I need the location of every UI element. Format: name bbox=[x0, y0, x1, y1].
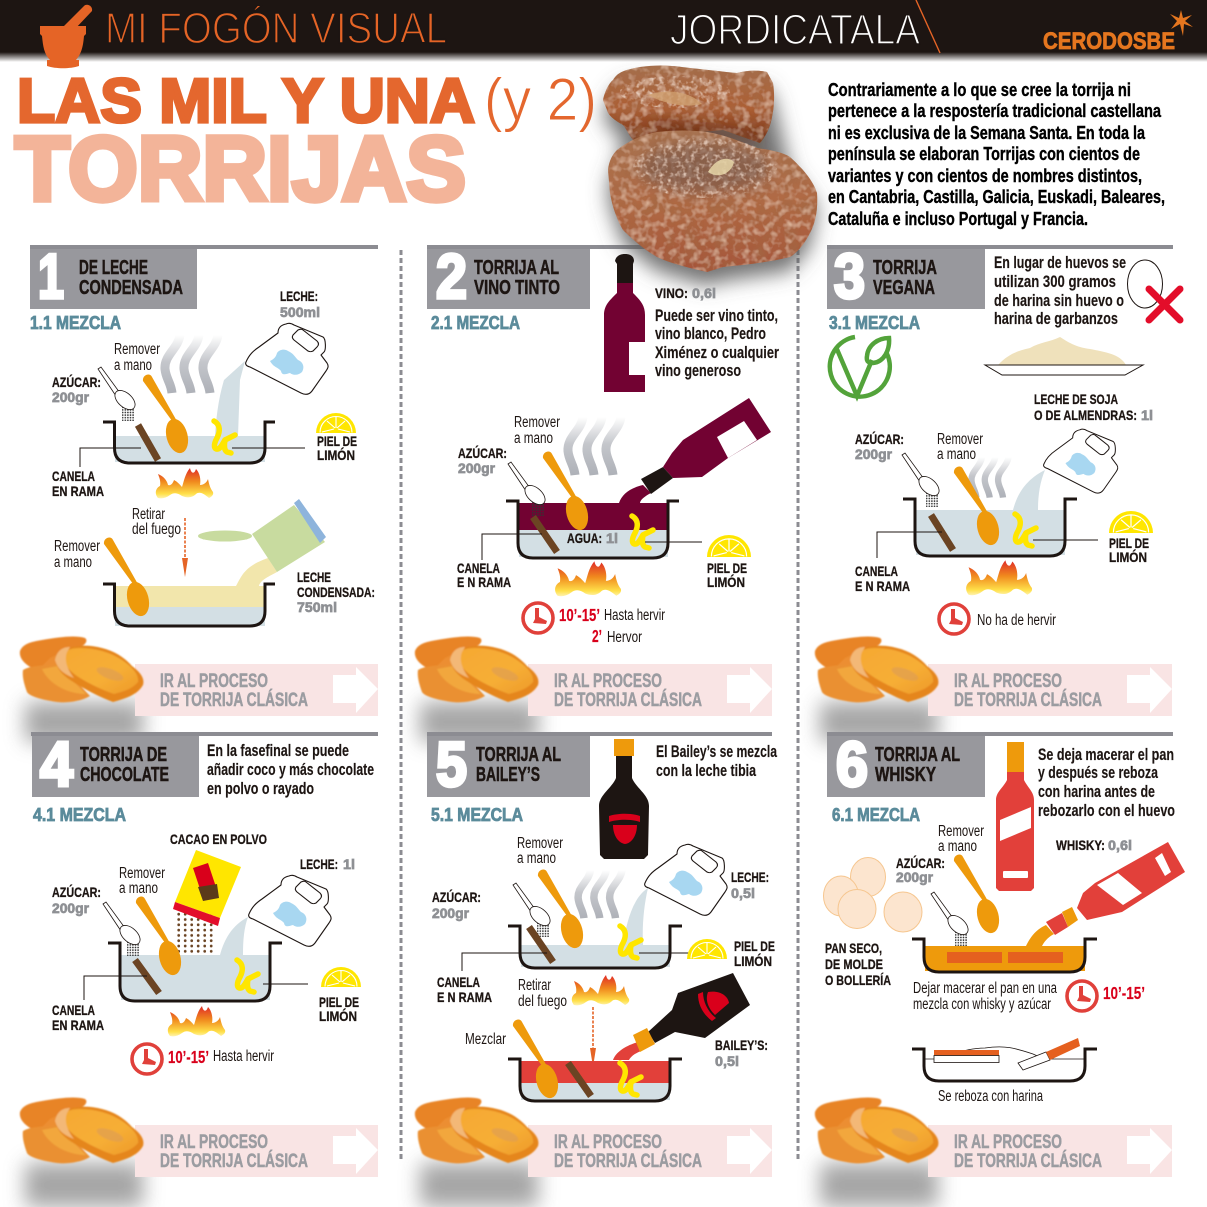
icon: sugar spoon bbox=[931, 892, 972, 946]
icon: crossed-out egg bbox=[1128, 260, 1180, 320]
pot with condensed milk bbox=[103, 584, 275, 626]
panel 2: torrija al vino tinto bbox=[415, 242, 779, 742]
canela label: E N RAMA bbox=[437, 989, 492, 1005]
shadow bbox=[820, 702, 938, 742]
retirar label: del fuego bbox=[518, 993, 567, 1010]
remover label bbox=[514, 414, 560, 447]
heading 2.1 mezcla: 2.1 MEZCLA bbox=[431, 313, 520, 333]
chocolate note bbox=[207, 741, 374, 798]
icon: lemon bbox=[321, 967, 361, 987]
panel 4 header: 4 bbox=[40, 730, 73, 800]
time notes: Hasta hervir bbox=[604, 607, 665, 624]
azucar label bbox=[432, 888, 481, 921]
shadow bbox=[25, 702, 143, 742]
panel 5 header: BAILEY’S bbox=[476, 764, 540, 786]
leader lines bbox=[462, 953, 696, 971]
whisky note: y después se reboza bbox=[1038, 763, 1158, 782]
egg substitute note: harina de garbanzos bbox=[994, 309, 1118, 328]
soy milk label: 1l bbox=[1141, 407, 1153, 423]
egg substitute note bbox=[994, 253, 1126, 328]
icon: bread slices bbox=[824, 858, 922, 932]
banner: ir al proceso bbox=[528, 1125, 772, 1177]
panel 1: de leche condensada bbox=[20, 242, 378, 742]
icon: cinnamon stick bbox=[135, 960, 159, 993]
icon: wooden spoon bbox=[954, 466, 1003, 548]
icon: cinnamon stick bbox=[931, 515, 953, 550]
canela label bbox=[437, 974, 492, 1005]
time note: Hasta hervir bbox=[213, 1048, 274, 1065]
arrow: down bbox=[590, 1007, 596, 1067]
remover label 2: a mano bbox=[54, 554, 92, 571]
panel 6 header bbox=[827, 730, 985, 800]
egg substitute note: En lugar de huevos se bbox=[994, 253, 1126, 272]
remover label: a mano bbox=[517, 850, 556, 867]
piel de limon label: LIMÓN bbox=[734, 952, 772, 969]
time note bbox=[168, 1047, 274, 1067]
azucar label bbox=[458, 444, 507, 476]
remover label: a mano bbox=[937, 446, 976, 463]
icon: cinnamon stick bbox=[138, 425, 158, 460]
condensed milk label: 750ml bbox=[297, 599, 337, 615]
panel 6 header: 6 bbox=[836, 730, 868, 800]
baileys note: El Bailey’s se mezcla bbox=[656, 742, 777, 761]
chocolate note: En la fasefinal se puede bbox=[207, 741, 349, 760]
canela label bbox=[52, 468, 104, 499]
azucar label: AZÚCAR: bbox=[896, 854, 945, 871]
time note: No ha de hervir bbox=[977, 612, 1056, 629]
panel 2 header bbox=[427, 242, 590, 312]
icon: wooden spoon 2 bbox=[513, 1019, 562, 1101]
banner: ir al proceso bbox=[928, 664, 1172, 716]
azucar label bbox=[896, 854, 945, 885]
icon: cinnamon stick bbox=[533, 517, 557, 552]
leche label: 0,5l bbox=[731, 885, 755, 901]
icon: clock bbox=[523, 603, 553, 633]
icon: lemon peel bbox=[214, 421, 235, 453]
pot with wine and water bbox=[506, 501, 679, 558]
leader lines bbox=[482, 534, 702, 560]
panel 5 header: TORRIJA AL bbox=[476, 744, 561, 766]
leche label: 500ml bbox=[280, 304, 320, 320]
icon: lemon bbox=[687, 939, 727, 959]
retirar label: del fuego bbox=[132, 521, 181, 538]
banner: ir al proceso: IR AL PROCESO bbox=[554, 671, 662, 692]
steam bbox=[971, 457, 1009, 498]
whisky note: con harina antes de bbox=[1038, 782, 1155, 801]
condensed milk label: CONDENSADA: bbox=[297, 584, 375, 600]
intro text bbox=[828, 79, 1165, 229]
soy milk label: LECHE DE SOJA bbox=[1034, 391, 1118, 407]
icon: sugar spoon bbox=[902, 453, 943, 507]
panel 4: torrija de chocolate bbox=[20, 730, 378, 1207]
azucar label: 200gr bbox=[432, 905, 470, 921]
panel 3 header: VEGANA bbox=[873, 277, 935, 299]
icon: mortar and pestle bbox=[40, 5, 92, 68]
remover label bbox=[114, 341, 160, 374]
icon: lemon bbox=[707, 535, 751, 557]
icon: milk jug bbox=[645, 844, 727, 915]
leader lines bbox=[877, 532, 1098, 558]
remover label bbox=[119, 865, 165, 897]
banner: ir al proceso: DE TORRIJA CLÁSICA bbox=[554, 1150, 702, 1172]
icon: lemon peel bbox=[620, 926, 641, 958]
banner: ir al proceso bbox=[135, 1125, 378, 1177]
icon: sugar spoon bbox=[513, 883, 554, 937]
remover label bbox=[938, 823, 984, 855]
shadow bbox=[25, 1163, 143, 1207]
banner: ir al proceso: IR AL PROCESO bbox=[160, 1132, 268, 1153]
title: TORRIJAS bbox=[15, 119, 466, 220]
baileys label: BAILEY’S: bbox=[715, 1037, 768, 1053]
panel 2 header: TORRIJA AL bbox=[474, 257, 559, 279]
piel de limon label: PIEL DE bbox=[734, 938, 775, 954]
photo: torrija bbox=[815, 1098, 938, 1163]
steam bbox=[165, 335, 218, 393]
icon: flame bbox=[156, 468, 213, 498]
panel 5: torrija al baileys bbox=[415, 730, 777, 1207]
banner: ir al proceso: IR AL PROCESO bbox=[954, 671, 1062, 692]
canela label: CANELA bbox=[52, 1002, 95, 1018]
pouring baileys bottle bbox=[613, 973, 750, 1060]
piel de limon label: LIMÓN bbox=[707, 573, 745, 590]
heading 1.1 mezcla: 1.1 MEZCLA bbox=[30, 313, 121, 333]
icon: wine bottle bbox=[604, 254, 646, 392]
leche label bbox=[280, 288, 320, 320]
remover label: Remover bbox=[514, 414, 560, 431]
icon: wooden spoon 2 bbox=[104, 537, 153, 619]
panel 3 header: TORRIJA bbox=[873, 257, 937, 279]
shadow bbox=[820, 1163, 938, 1207]
icon: milk jug bbox=[249, 875, 331, 946]
azucar label bbox=[52, 373, 101, 405]
wine note: vino generoso bbox=[655, 361, 741, 380]
retirar label bbox=[518, 977, 567, 1010]
leader lines bbox=[80, 448, 305, 467]
panel 3 header: 3 bbox=[834, 242, 865, 312]
panel 6: torrija al whisky bbox=[815, 730, 1185, 1207]
piel de limon label bbox=[707, 560, 747, 590]
canela label bbox=[855, 563, 910, 594]
flour note: Se reboza con harina bbox=[938, 1088, 1043, 1105]
leche label: LECHE: bbox=[280, 288, 318, 304]
panel 6 header: TORRIJA AL bbox=[875, 744, 960, 766]
piel de limon label: PIEL DE bbox=[319, 994, 359, 1010]
steam bbox=[568, 417, 621, 475]
icon: cocoa box bbox=[173, 850, 241, 926]
icon: whisky bottle bbox=[996, 742, 1034, 891]
brand: Cerodosbe bbox=[1043, 10, 1193, 55]
wine note: vino blanco, Pedro bbox=[655, 324, 766, 343]
leche label: LECHE: bbox=[300, 856, 338, 872]
canela label bbox=[457, 560, 511, 590]
remover label: a mano bbox=[514, 430, 553, 447]
retirar label: Retirar bbox=[132, 506, 165, 523]
banner: ir al proceso: IR AL PROCESO bbox=[554, 1132, 662, 1153]
leche label bbox=[731, 869, 769, 901]
remover label: Remover bbox=[119, 865, 165, 882]
condensed milk can bbox=[198, 499, 326, 586]
piel de limon label bbox=[319, 994, 359, 1024]
condensed milk label bbox=[297, 569, 375, 615]
intro text: Cataluña e incluso Portugal y Francia. bbox=[828, 208, 1088, 229]
icon: lemon peel bbox=[1015, 514, 1036, 546]
whisky amount: WHISKY: bbox=[1056, 837, 1105, 853]
icon: clock bbox=[1067, 981, 1097, 1011]
panel 1 header: CONDENSADA bbox=[79, 277, 183, 299]
piel de limon label: PIEL DE bbox=[1109, 535, 1149, 551]
icon: wooden spoon bbox=[538, 869, 587, 951]
piel de limon label: PIEL DE bbox=[707, 560, 747, 576]
panel 1 header: 1 bbox=[38, 242, 64, 312]
baileys label bbox=[715, 1037, 768, 1069]
banner: ir al proceso: DE TORRIJA CLÁSICA bbox=[160, 689, 308, 711]
piel de limon label bbox=[734, 938, 775, 969]
heading 6.1 mezcla: 6.1 MEZCLA bbox=[832, 805, 920, 825]
wine note: Puede ser vino tinto, bbox=[655, 306, 778, 325]
milk stream and pot bbox=[103, 361, 275, 463]
remover label: Remover bbox=[938, 823, 984, 840]
milk stream and pot bbox=[903, 470, 1077, 556]
soy milk label bbox=[1034, 391, 1153, 423]
icon: baileys bottle bbox=[599, 739, 649, 859]
mezclar label: Mezclar bbox=[465, 1031, 506, 1048]
remover label 2: Remover bbox=[54, 538, 100, 555]
vino amount: VINO: bbox=[655, 285, 688, 301]
icon: lemon peel bbox=[237, 960, 258, 992]
icon: flame bbox=[555, 561, 621, 596]
azucar label: 200gr bbox=[458, 460, 496, 476]
canela label: EN RAMA bbox=[52, 1017, 104, 1033]
cacao label: CACAO EN POLVO bbox=[170, 831, 267, 847]
soy milk label: O DE ALMENDRAS: bbox=[1034, 407, 1137, 423]
panel 5 header: 5 bbox=[436, 730, 467, 800]
steam bbox=[578, 870, 622, 918]
intro text: Contrariamente a lo que se cree la torrija ni bbox=[828, 79, 1131, 100]
icon: flour on plate bbox=[985, 337, 1143, 375]
photo: torrija bbox=[415, 1098, 538, 1163]
time: 10’-15’ bbox=[1103, 983, 1145, 1003]
icon: wooden spoon bbox=[136, 896, 185, 978]
shadow bbox=[420, 1163, 538, 1207]
piel de limon label bbox=[1109, 535, 1149, 565]
heading 3.1 mezcla: 3.1 MEZCLA bbox=[829, 313, 920, 333]
piel de limon label bbox=[317, 433, 357, 463]
bread label bbox=[825, 940, 891, 988]
agua label: AGUA: bbox=[567, 530, 602, 546]
icon: flame bbox=[168, 1006, 225, 1036]
photo: torrija bbox=[415, 637, 538, 702]
wine note bbox=[655, 306, 779, 380]
whisky note bbox=[1038, 745, 1175, 820]
azucar label: 200gr bbox=[896, 869, 934, 885]
header band bbox=[0, 0, 1207, 62]
bread label: O BOLLERÍA bbox=[825, 972, 891, 988]
chocolate note: añadir coco y más chocolate bbox=[207, 760, 374, 779]
leche label: 1l bbox=[343, 856, 355, 872]
panel 3: torrija vegana bbox=[815, 242, 1180, 742]
pot with flour bbox=[912, 1038, 1097, 1081]
icon: wooden spoon bbox=[543, 451, 592, 533]
heading 5.1 mezcla: 5.1 MEZCLA bbox=[431, 805, 523, 825]
baileys note bbox=[656, 742, 777, 780]
piel de limon label: PIEL DE bbox=[317, 433, 357, 449]
chocolate note: en polvo o rayado bbox=[207, 779, 314, 798]
pot with whisky bbox=[912, 939, 1097, 972]
remover label: Remover bbox=[114, 341, 160, 358]
cacao dust bbox=[176, 912, 216, 964]
brand: Cerodosbe: CERODOSBE bbox=[1043, 28, 1175, 55]
separators bbox=[401, 250, 798, 1162]
panel 4 header bbox=[32, 730, 199, 800]
banner: ir al proceso bbox=[528, 664, 772, 716]
piel de limon label: LIMÓN bbox=[317, 446, 355, 463]
pouring whisky bottle bbox=[1026, 842, 1185, 946]
maceration note: mezcla con whisky y azúcar bbox=[913, 996, 1051, 1013]
heading 4.1 mezcla: 4.1 MEZCLA bbox=[33, 805, 126, 825]
icon: sugar spoon bbox=[508, 462, 549, 516]
maceration note: Dejar macerar el pan en una bbox=[913, 980, 1057, 997]
banner: ir al proceso bbox=[928, 1125, 1172, 1177]
remover label: a mano bbox=[938, 838, 977, 855]
piel de limon label: LIMÓN bbox=[1109, 548, 1147, 565]
vino amount: 0,6l bbox=[692, 285, 716, 301]
maceration note bbox=[913, 980, 1057, 1013]
piel de limon label: LIMÓN bbox=[319, 1007, 357, 1024]
azucar label: 200gr bbox=[52, 389, 90, 405]
icon: lemon peel 2 bbox=[620, 1063, 641, 1095]
photo: torrija bbox=[815, 637, 938, 702]
canela label: CANELA bbox=[457, 560, 500, 576]
icon: lemon peel bbox=[632, 516, 653, 548]
banner: ir al proceso: DE TORRIJA CLÁSICA bbox=[160, 1150, 308, 1172]
title bbox=[15, 66, 597, 220]
baileys label: 0,5l bbox=[715, 1053, 739, 1069]
remover label 2 bbox=[54, 538, 100, 571]
azucar label bbox=[855, 430, 904, 462]
panel 3 header bbox=[827, 242, 985, 312]
icon: flame bbox=[572, 975, 629, 1005]
retirar label bbox=[132, 506, 181, 538]
panel 5 header bbox=[427, 730, 590, 800]
canela label: EN RAMA bbox=[52, 483, 104, 499]
panel 6 header: WHISKY bbox=[875, 764, 937, 786]
photo: caramelised torrijas bbox=[603, 65, 817, 286]
icon: lemon bbox=[316, 413, 356, 433]
azucar label bbox=[52, 883, 101, 916]
banner: ir al proceso: DE TORRIJA CLÁSICA bbox=[554, 689, 702, 711]
canela label: CANELA bbox=[855, 563, 898, 579]
icon: vegan symbol bbox=[830, 337, 890, 397]
retirar label: Retirar bbox=[518, 977, 551, 994]
time notes bbox=[559, 605, 665, 646]
azucar label: AZÚCAR: bbox=[458, 444, 507, 461]
panel 4 header: CHOCOLATE bbox=[80, 764, 169, 786]
title: LAS MIL Y UNA bbox=[17, 67, 475, 136]
time notes: 10’-15’ bbox=[559, 605, 600, 625]
icon: milk jug bbox=[246, 323, 328, 394]
wine note: Ximénez o cualquier bbox=[655, 343, 779, 362]
canela label bbox=[52, 1002, 104, 1033]
canela label: CANELA bbox=[52, 468, 95, 484]
panel 1 header bbox=[30, 242, 197, 312]
azucar label: AZÚCAR: bbox=[52, 373, 101, 390]
icon: milk jug bbox=[1044, 429, 1118, 493]
pot with baileys bbox=[508, 1059, 682, 1101]
remover label: Remover bbox=[937, 431, 983, 448]
baileys note: con la leche tibia bbox=[656, 761, 756, 780]
bread label: DE MOLDE bbox=[825, 956, 883, 972]
icon: cinnamon stick bbox=[529, 927, 553, 962]
icon: flame bbox=[966, 560, 1032, 595]
remover label bbox=[937, 431, 983, 463]
pouring wine bottle bbox=[619, 398, 771, 503]
azucar label: AZÚCAR: bbox=[52, 883, 101, 900]
icon: lemon bbox=[1109, 511, 1153, 533]
milk stream and pot bbox=[108, 917, 282, 1001]
whisky amount: 0,6l bbox=[1108, 837, 1132, 853]
canela label: CANELA bbox=[437, 974, 480, 990]
icon: wooden spoon bbox=[143, 374, 192, 456]
panel 4 header: TORRIJA DE bbox=[80, 744, 167, 766]
remover label bbox=[517, 835, 563, 867]
remover label: a mano bbox=[119, 880, 158, 897]
banner: ir al proceso: DE TORRIJA CLÁSICA bbox=[954, 689, 1102, 711]
banner: ir al proceso: IR AL PROCESO bbox=[954, 1132, 1062, 1153]
leader lines bbox=[84, 976, 308, 1000]
brand: Mi Fogón Visual: MI FOGÓN VISUAL bbox=[105, 4, 447, 53]
agua label: 1l bbox=[606, 530, 618, 546]
azucar label: AZÚCAR: bbox=[432, 888, 481, 905]
egg substitute note: utilizan 300 gramos bbox=[994, 272, 1116, 291]
icon: cinnamon stick 2 bbox=[568, 1063, 591, 1096]
canela label: E N RAMA bbox=[457, 574, 511, 590]
remover label: Remover bbox=[517, 835, 563, 852]
icon: clock bbox=[132, 1044, 162, 1074]
shadow bbox=[420, 702, 538, 742]
panel 2 header: VINO TINTO bbox=[474, 277, 560, 299]
banner: ir al proceso bbox=[135, 664, 378, 716]
title: (y 2) bbox=[484, 66, 597, 133]
bread label: PAN SECO, bbox=[825, 940, 882, 956]
leche label: LECHE: bbox=[731, 869, 769, 885]
azucar label: 200gr bbox=[52, 900, 90, 916]
photo: torrija bbox=[20, 637, 143, 702]
remover label: a mano bbox=[114, 357, 152, 374]
time notes: 2’ bbox=[592, 626, 602, 646]
banner: ir al proceso: DE TORRIJA CLÁSICA bbox=[954, 1150, 1102, 1172]
panel 2 header: 2 bbox=[436, 242, 467, 312]
panel 1 header: DE LECHE bbox=[79, 257, 148, 279]
time notes: Hervor bbox=[607, 629, 642, 646]
azucar label: 200gr bbox=[855, 446, 893, 462]
egg substitute note: de harina sin huevo o bbox=[994, 291, 1124, 310]
icon: wooden spoon bbox=[954, 854, 1003, 936]
time note: 10’-15’ bbox=[168, 1047, 209, 1067]
arrow: down bbox=[182, 518, 188, 577]
photo: torrija bbox=[20, 1098, 143, 1163]
brand: Jordi Catalá: JORDICATALA bbox=[670, 6, 920, 54]
condensed milk label: LECHE bbox=[297, 569, 331, 585]
icon: sugar spoon bbox=[103, 902, 144, 956]
vino amount bbox=[655, 285, 716, 301]
banner: ir al proceso: IR AL PROCESO bbox=[160, 671, 268, 692]
icon: sugar spoon bbox=[98, 367, 139, 421]
canela label: E N RAMA bbox=[855, 578, 910, 594]
azucar label: AZÚCAR: bbox=[855, 430, 904, 447]
icon: clock bbox=[939, 604, 969, 634]
milk stream and pot bbox=[508, 888, 682, 968]
